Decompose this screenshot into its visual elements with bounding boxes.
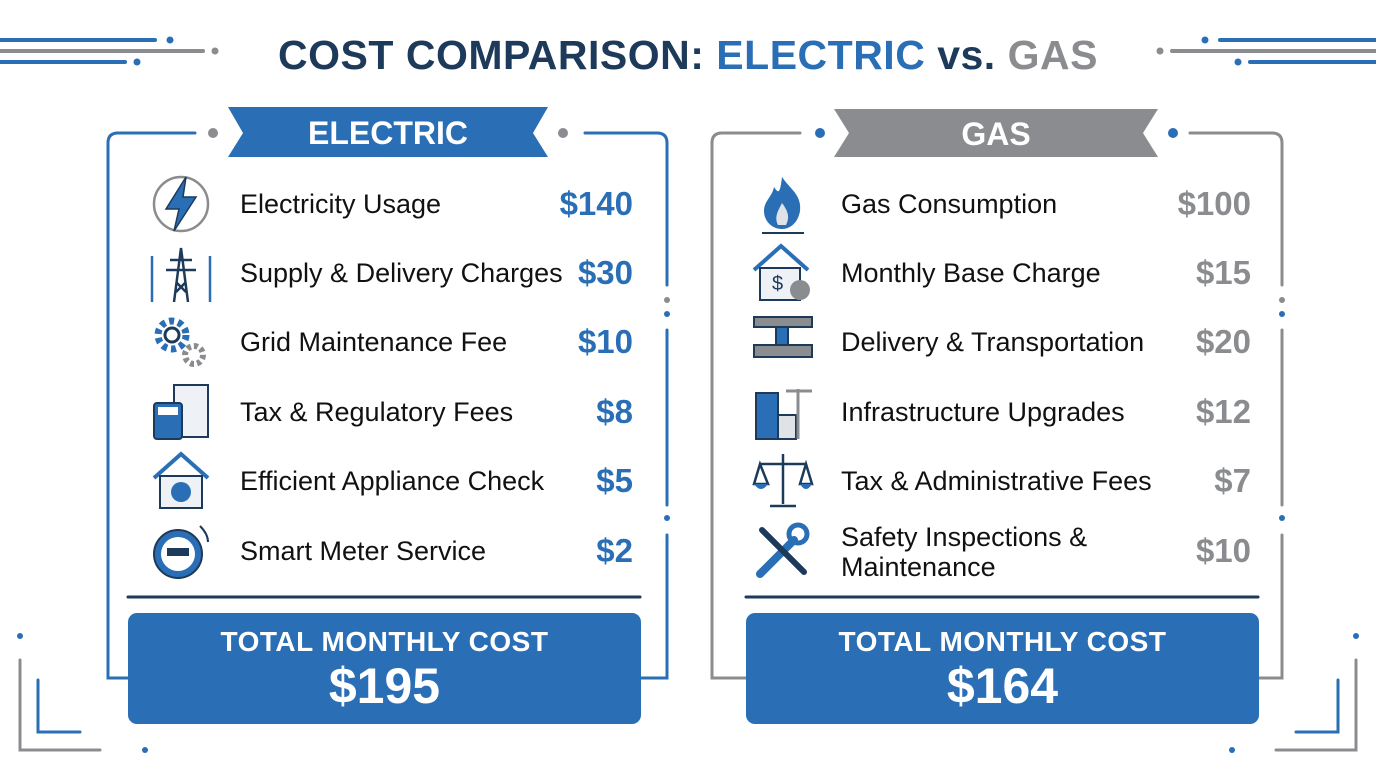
panel: electric rows: Supply & Delivery Charges [240, 258, 563, 288]
panel: gas rows: $15 [1196, 254, 1251, 291]
panel: electric rows: Efficient Appliance Check [240, 466, 544, 496]
icon: meter [153, 525, 209, 579]
icon: gears [154, 318, 206, 367]
icon: calculator [153, 384, 209, 440]
panel: electric rows: Electricity Usage [240, 189, 441, 219]
panel: electric rows: $10 [578, 323, 633, 360]
total: gas: TOTAL MONTHLY COST [839, 626, 1166, 657]
panel: gas rows: Monthly Base Charge [841, 258, 1101, 288]
panel: gas rows: $100 [1178, 185, 1251, 222]
icon: lightning [152, 176, 210, 232]
panel: gas rows: $7 [1214, 462, 1251, 499]
banner: gas: GAS [961, 116, 1031, 152]
total: electric: TOTAL MONTHLY COST [221, 626, 548, 657]
panel: electric rows: $30 [578, 254, 633, 291]
panel: electric rows: $5 [596, 462, 633, 499]
panel: gas rows [752, 177, 1251, 582]
total: gas [746, 613, 1259, 724]
icon: house dollar: $ [772, 273, 783, 295]
icon: buildings crane [755, 389, 812, 440]
panel: gas rows: Gas Consumption [841, 189, 1057, 219]
icon: pipe [753, 316, 813, 358]
banner: gas [834, 109, 1158, 157]
panel: electric rows: Grid Maintenance Fee [240, 327, 507, 357]
total: gas: $164 [947, 658, 1058, 714]
title: COST COMPARISON: ELECTRIC vs. GAS [278, 32, 1098, 78]
panel: gas rows: $20 [1196, 323, 1251, 360]
panel: electric rows: Tax & Regulatory Fees [240, 397, 513, 427]
panel: gas rows: Delivery & Transportation [841, 327, 1144, 357]
icon: tools [756, 522, 810, 578]
panel: electric rows: $2 [596, 532, 633, 569]
icon: pylon [150, 248, 212, 302]
panel: electric rows: $140 [560, 185, 633, 222]
icon: house fan [152, 452, 210, 509]
total: electric: $195 [329, 658, 440, 714]
banner: electric [228, 107, 548, 157]
panel: gas rows: $12 [1196, 393, 1251, 430]
panel: gas rows: Maintenance [841, 552, 996, 582]
panel: gas rows: $10 [1196, 532, 1251, 569]
panel: gas rows: Infrastructure Upgrades [841, 397, 1125, 427]
panel: gas rows: Safety Inspections & [841, 522, 1087, 552]
total: electric [128, 613, 641, 724]
panel: electric rows [150, 176, 633, 579]
panel: electric rows: $8 [596, 393, 633, 430]
panel: gas rows: Tax & Administrative Fees [841, 466, 1152, 496]
icon: house dollar [752, 244, 810, 301]
icon: flame [762, 177, 804, 234]
icon: scales [752, 454, 814, 508]
banner: electric: ELECTRIC [308, 115, 468, 151]
panel: electric rows: Smart Meter Service [240, 536, 486, 566]
